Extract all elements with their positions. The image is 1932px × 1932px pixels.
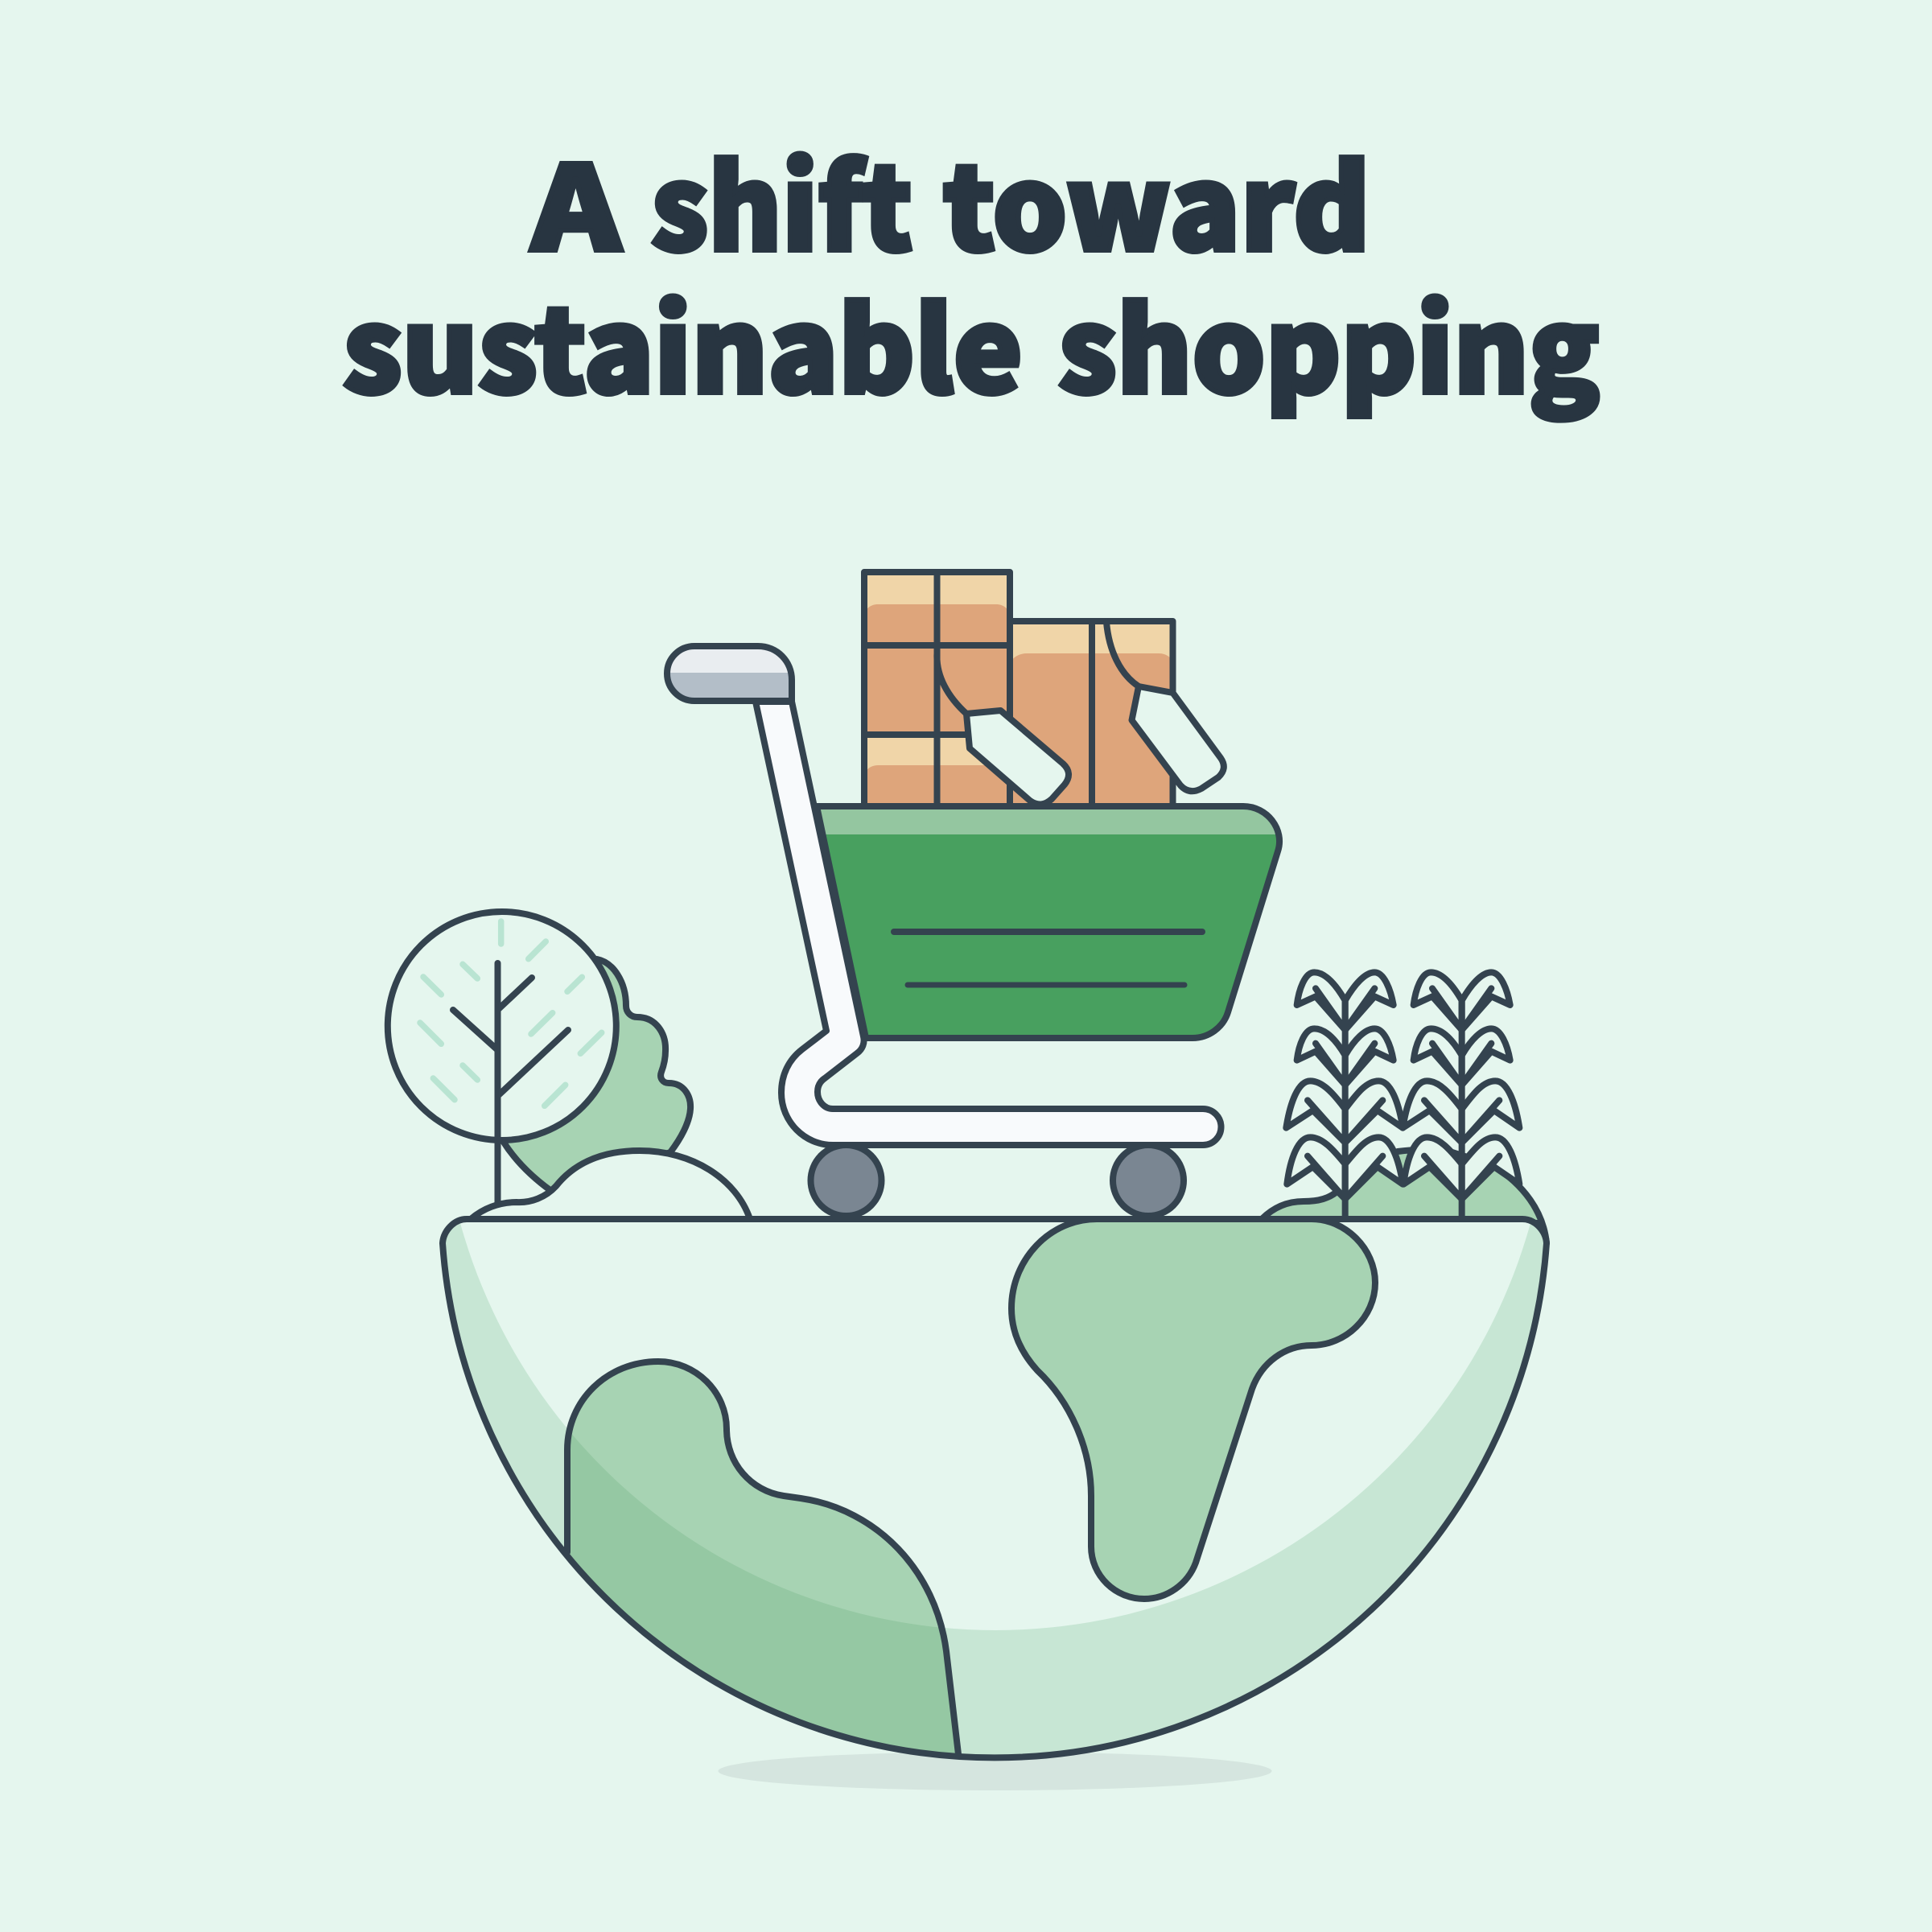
wheel right [1113, 1145, 1184, 1216]
tree [388, 912, 616, 1207]
title [343, 115, 1600, 426]
corn stalk left [1286, 972, 1403, 1219]
continent left [567, 1361, 958, 1754]
globe rim [443, 1219, 1547, 1757]
cart handle [667, 646, 792, 701]
corn plants [1286, 972, 1519, 1219]
wheel left [811, 1145, 882, 1216]
globe [439, 1216, 1550, 1761]
hill left [471, 1151, 750, 1219]
title: shift [651, 115, 912, 284]
tree leaf marks [420, 921, 602, 1106]
basket line upper [894, 929, 1202, 935]
continent right [1011, 1219, 1375, 1599]
basket [817, 806, 1279, 1038]
bush behind corn [1262, 1150, 1547, 1243]
box left [864, 572, 1010, 810]
globe shadow [718, 1752, 1271, 1790]
title: toward [943, 115, 1370, 284]
box right [1010, 621, 1173, 810]
title: sustainable [343, 257, 1023, 426]
illustration [388, 520, 1551, 1757]
tag right [1131, 686, 1224, 791]
title: shopping [1058, 257, 1600, 426]
basket line lower [908, 982, 1184, 988]
tree trunk and branches [453, 963, 568, 1207]
globe outline [443, 1219, 1547, 1757]
boxes and price tags [864, 572, 1224, 810]
corn stalk right [1403, 972, 1519, 1219]
shopping cart [667, 646, 1279, 1216]
cart frame [756, 702, 1221, 1145]
tag left [966, 711, 1069, 805]
globe inner highlight [460, 1222, 1530, 1630]
title: A [530, 115, 621, 284]
bush behind tree [503, 959, 690, 1191]
tree crown [388, 912, 616, 1140]
